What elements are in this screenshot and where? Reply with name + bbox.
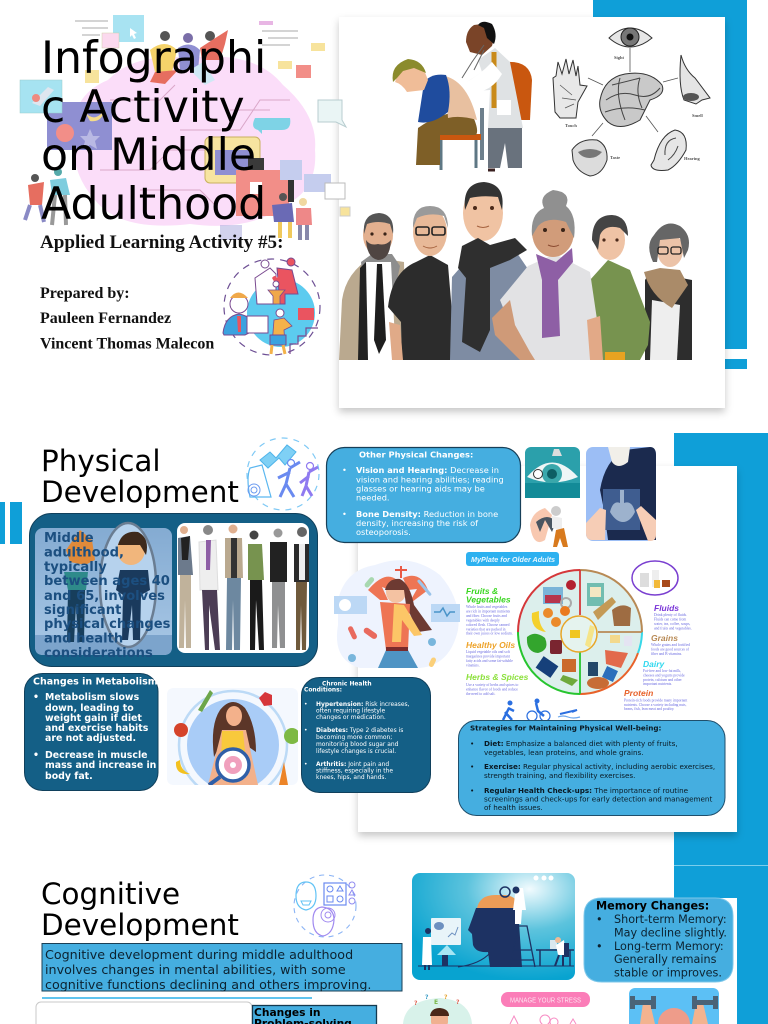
panel: MyPlate for older adults: [466, 552, 692, 721]
panel: strategies for physical well-being: Strategies for Maintaining Physical Well-being:: [470, 724, 661, 732]
food group labels: Protein-rich foods provide many important: [624, 698, 687, 702]
panel: other physical changes: [326, 448, 520, 542]
panel: other physical changes: Other Physical Changes:: [359, 450, 473, 460]
panel: changes in metabolism: Changes in Metabolism: [33, 676, 158, 688]
icons: walking, cycling, swimming: [503, 699, 580, 721]
overview text: considerations: [44, 646, 153, 661]
food group labels: Drink plenty of fluids.: [654, 613, 687, 617]
food group labels: colored flesh. Choose canned: [466, 623, 510, 627]
panel: other physical changes: vision and hearing abilities; reading: [356, 474, 504, 484]
panel: chronic health conditions: Chronic Health: [322, 680, 372, 688]
overview text: between ages 40: [44, 574, 170, 589]
illustration: man surrounded by question marks: ?: [414, 1000, 418, 1007]
panel: changes in metabolism: body fat.: [45, 771, 93, 782]
panel: strategies for physical well-being: •: [470, 739, 474, 748]
panel: cognitive intro text: cognitive functions declining and others improving.: [45, 977, 371, 992]
food group labels: Protein: [624, 688, 653, 698]
overview text: and health: [44, 632, 123, 646]
panel: memory changes: •: [596, 940, 603, 953]
panel: memory changes: stable or improves.: [614, 966, 722, 980]
panel: other physical changes: osteoporosis.: [356, 527, 411, 537]
food group labels: Whole fruits and vegetables: [466, 605, 508, 609]
illustration: man surrounded by question marks: ?: [444, 994, 448, 1001]
panel: strategies for physical well-being: Regular Health Check-ups: The importance of routine: [484, 786, 689, 795]
food group labels: Healthy Oils: [466, 640, 515, 650]
panel: changes in metabolism: mass and increase in: [45, 760, 156, 771]
panel: strategies for physical well-being: vegetables, lean proteins, and whole grains.: [484, 748, 644, 757]
illustration: brain lifting dumbbells: [629, 988, 719, 1024]
icon: family and work life: [223, 258, 320, 355]
food group labels: enhance flavor of foods and reduce: [466, 688, 518, 692]
credits: [40, 285, 214, 352]
title: c Activity: [41, 82, 245, 133]
panel: changes in problem-solving: [252, 1006, 376, 1024]
food group labels: important nutrients.: [643, 682, 672, 686]
overview text: typically: [44, 560, 107, 575]
panel: memory changes: Memory Changes:: [596, 900, 709, 912]
left accent bars: [0, 502, 22, 977]
panel: cognitive intro text: [42, 944, 402, 992]
panel: changes in metabolism: and exercise habits: [45, 723, 149, 734]
panel: chronic health conditions: knees, hips, and hands.: [316, 774, 387, 781]
panel: cognitive intro text: involves changes in mental abilities, with some: [45, 962, 346, 977]
food group labels: foods are good sources of: [651, 648, 690, 652]
panel: chronic health conditions: changes or medication.: [316, 714, 386, 721]
food group labels: vegetables with deeply: [466, 618, 500, 622]
food group labels: Grains: [651, 633, 678, 643]
panel: chronic health conditions: becoming more common;: [316, 734, 392, 741]
food group labels: and fiber. Choose fruits and: [466, 614, 507, 618]
panel: other physical changes: •: [342, 465, 347, 475]
panel: other physical changes: density, increasing the risk of: [356, 518, 479, 528]
illustration: five senses diagram: Taste: [610, 155, 620, 160]
panel: strategies for physical well-being: of health issues.: [484, 803, 543, 812]
illustration: five senses diagram: Smell: [692, 113, 703, 118]
illustration: doctor examining patient: [393, 22, 532, 170]
food group labels: margarines provide important: [466, 654, 510, 658]
panel: chronic health conditions: Hypertension: Risk increases,: [316, 701, 410, 708]
food group labels: varieties that are packed in: [466, 628, 506, 632]
fluids circle: [632, 561, 678, 595]
overview text: adulthood,: [44, 546, 124, 560]
slide 2 blue frame: [674, 433, 768, 1024]
myplate banner: [466, 552, 559, 566]
overview text: Middle: [44, 531, 94, 546]
food group labels: fiber and B vitamins.: [651, 652, 682, 656]
illustration: man surrounded by question marks: [403, 994, 472, 1024]
panel: middle adulthood overview: [30, 514, 318, 666]
food group labels: Fluids can come from: [654, 618, 686, 622]
panel: chronic health conditions: often requiring lifestyle: [316, 708, 386, 714]
panel: white image card: [36, 1002, 252, 1024]
food group labels: fatty acids and some fat-soluble: [466, 659, 513, 663]
panel: strategies for physical well-being: Diet: Emphasize a balanced diet with plenty of fruits,: [484, 739, 678, 748]
panel: chronic health conditions: [302, 678, 430, 792]
food group labels: Herbs & Spices: [466, 672, 529, 682]
panel: chronic health conditions: •: [304, 701, 308, 708]
illustration: man surrounded by question marks: E: [434, 999, 438, 1006]
panel: changes in metabolism: Metabolism slows: [45, 692, 140, 703]
illustration: five senses diagram: Sight: [614, 55, 625, 60]
illustration: manage your stress: MANAGE YOUR STRESS: [510, 998, 581, 1004]
food group labels: Vegetables: [466, 594, 511, 604]
food group labels: Whole grains and fortified: [651, 643, 690, 647]
slide 1 blue frame: [593, 0, 747, 369]
panel: chronic health conditions: Diabetes: Type 2 diabetes is: [316, 727, 403, 734]
food group labels: Fluids: [654, 603, 679, 613]
credits: Pauleen Fernandez: [40, 310, 171, 327]
panel: strategies for physical well-being: •: [470, 762, 474, 771]
panel: changes in metabolism: are not adjusted.: [45, 733, 136, 744]
panel: memory changes: Short-term Memory:: [614, 913, 727, 926]
panel: strategies for physical well-being: screenings and check-ups for early detection and management: [484, 794, 712, 804]
panel: strategies for physical well-being: strength training, and flexibility exercises.: [484, 771, 635, 780]
food group labels: nutrients. Choose a variety including nuts,: [624, 703, 686, 708]
panel: changes in metabolism: •: [33, 750, 39, 761]
panel: changes in metabolism: weight gain if diet: [45, 713, 142, 724]
illustration: six standing adults: [177, 523, 309, 653]
food group labels: water, tea, coffee, soups,: [654, 622, 690, 627]
plate chart: [518, 570, 642, 694]
illustration: scientists studying a brain: [412, 873, 575, 980]
panel: strategies for physical well-being: Exercise: Regular physical activity, including aerobic exercises,: [484, 762, 715, 771]
illustration: man surrounded by question marks: ?: [425, 994, 429, 1001]
title: [41, 33, 266, 230]
illustration: eye examination: [525, 447, 580, 498]
panel: strategies for physical well-being: [458, 720, 725, 816]
food group labels: vitamins.: [466, 664, 480, 668]
subtitle: Applied Learning Activity #5:: [40, 232, 283, 253]
panel: chronic health conditions: Arthritis: Joint pain and: [316, 761, 389, 768]
illustration: group of middle-aged adults: [339, 182, 692, 360]
panel: other physical changes: needed.: [356, 492, 390, 502]
food group labels: and fruits and vegetables.: [654, 626, 692, 630]
slide 1 white card: [339, 17, 725, 408]
illustration: manage your stress: [501, 992, 590, 1024]
panel: chronic health conditions: Conditions:: [304, 686, 342, 694]
heading: cognitive development: Cognitive: [41, 877, 180, 911]
illustration: woman with headache and medications: [334, 560, 460, 668]
panel: memory changes: Long-term Memory:: [614, 940, 724, 953]
myplate banner: MyPlate for Older Adults: [471, 555, 555, 564]
heading: cognitive development: [41, 877, 239, 942]
food group labels: are rich in important nutrients: [466, 610, 511, 614]
panel: memory changes: May decline slightly.: [614, 926, 727, 940]
panel: chronic health conditions: lifestyle changes is crucial.: [316, 748, 396, 755]
food group labels: their own juices or low sodium.: [466, 632, 513, 636]
panel: memory changes: •: [596, 913, 603, 926]
panel: other physical changes: •: [342, 509, 347, 519]
panel: other physical changes: Vision and Hearing: Decrease in: [356, 465, 499, 475]
food group labels: the need to add salt.: [466, 692, 495, 696]
illustration: five senses diagram: [553, 28, 710, 176]
food group labels: Dairy: [643, 659, 666, 669]
title: on Middle: [41, 130, 256, 181]
illustration: man looking in mirror: [35, 523, 172, 655]
credits: Vincent Thomas Malecon: [40, 336, 214, 352]
heading: cognitive development: Development: [41, 908, 239, 942]
panel: changes in metabolism: [24, 674, 158, 790]
food group labels: protein, calcium and other: [643, 678, 682, 683]
panel: chronic health conditions: stiffness, especially in the: [316, 768, 393, 774]
title: Infographi: [41, 33, 266, 84]
food group labels: Liquid vegetable oils and soft: [466, 650, 510, 654]
food group labels: cheeses and yogurts provide: [643, 674, 685, 678]
panel: changes in problem-solving: Changes in: [254, 1006, 321, 1019]
overview text: significant: [44, 603, 121, 618]
heading: physical development: Development: [41, 475, 239, 509]
food group labels: [466, 586, 692, 712]
title: Adulthood: [41, 179, 266, 230]
overview text: [44, 531, 171, 661]
overview text: physical changes: [44, 617, 171, 632]
panel: other physical changes: Bone Density: Reduction in bone: [356, 509, 498, 519]
heading: physical development: Physical: [41, 444, 161, 478]
illustration: metabolism woman with magnifier: [167, 688, 298, 785]
panel: memory changes: [584, 898, 733, 982]
panel: changes in metabolism: down, leading to: [45, 703, 134, 714]
panel: changes in metabolism: •: [33, 692, 39, 703]
icon: tape, mat and exercise figures: [247, 438, 319, 510]
slide 3 white card: [0, 898, 737, 1024]
panel: memory changes: Generally remains: [614, 953, 717, 966]
panel: changes in metabolism: Decrease in muscle: [45, 750, 148, 761]
panel: strategies for physical well-being: •: [470, 786, 474, 795]
illustration: brain with people behind title: [20, 15, 350, 240]
food group labels: Use a variety of herbs and spices to: [466, 683, 518, 687]
heading: physical development: [41, 444, 239, 509]
panel: chronic health conditions: •: [304, 761, 308, 768]
food group labels: beans, fish, lean meat and poultry.: [624, 707, 674, 712]
illustration: five senses diagram: Hearing: [684, 156, 700, 161]
panel: cognitive intro text: Cognitive development during middle adulthood: [45, 947, 353, 962]
food group labels: Fat-free and low-fat milk,: [643, 669, 681, 674]
icon: cognitive shapes and brain: [294, 875, 356, 937]
credits: Prepared by:: [40, 285, 130, 302]
illustration: hearing aid and elderly person: [530, 506, 568, 547]
food group labels: Fruits &: [466, 586, 498, 596]
illustration: man surrounded by question marks: ?: [456, 999, 460, 1006]
overview text: and 65, involves: [44, 589, 165, 604]
illustration: five senses diagram: Touch: [565, 123, 577, 128]
panel: chronic health conditions: •: [304, 727, 308, 734]
panel: chronic health conditions: monitoring blood sugar and: [316, 741, 399, 748]
slide 2 white card: [358, 466, 737, 832]
panel: other physical changes: glasses or hearing aids may be: [356, 484, 485, 494]
illustration: bone density x-ray: [586, 447, 656, 541]
